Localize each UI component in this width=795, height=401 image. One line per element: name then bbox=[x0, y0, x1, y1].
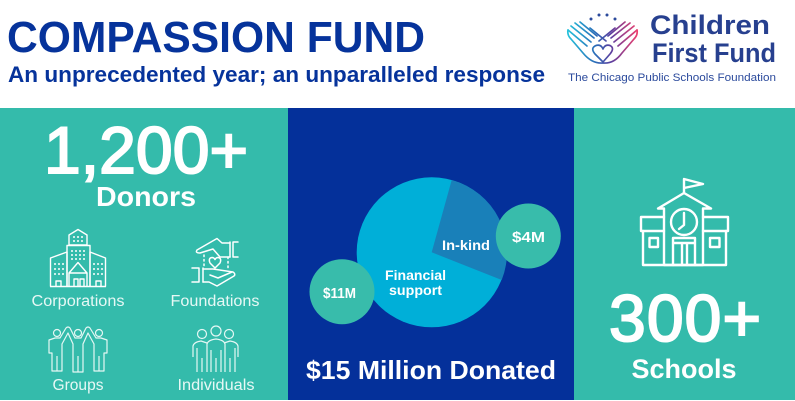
panel: schools bbox=[574, 108, 795, 400]
panel: donors bbox=[0, 108, 288, 400]
foundations label: Foundations bbox=[170, 293, 260, 310]
title: COMPASSION FUND bbox=[7, 13, 425, 62]
panel: total donated bbox=[288, 108, 574, 400]
callout: $4M: $4M bbox=[512, 229, 545, 246]
icon: groups raised arms bbox=[49, 327, 107, 372]
subtitle: An unprecedented year; an unparalleled response bbox=[8, 62, 545, 87]
logo stars bbox=[590, 14, 616, 20]
donors number: 1,200+ bbox=[44, 113, 248, 187]
callout: $4M bbox=[496, 204, 561, 268]
icon: corporations building bbox=[50, 230, 106, 286]
logo name line 1: Children bbox=[650, 10, 770, 40]
corporations label: Corporations bbox=[32, 293, 125, 310]
schools number: 300+ bbox=[609, 281, 761, 355]
pie slice: in-kind bbox=[432, 180, 507, 280]
logo name line 2: First Fund bbox=[652, 38, 776, 68]
callout: $11M bbox=[310, 259, 374, 324]
pie chart bbox=[357, 177, 507, 327]
financial support label: Financial bbox=[385, 268, 446, 283]
groups label: Groups bbox=[52, 377, 104, 394]
financial support label line 2: support bbox=[389, 283, 443, 298]
logo: Children First Fund bbox=[568, 10, 776, 84]
donors label: Donors bbox=[96, 181, 196, 212]
icon: school building bbox=[641, 179, 728, 265]
icon: foundations hands bbox=[192, 238, 238, 286]
logo tagline: The Chicago Public Schools Foundation bbox=[568, 72, 776, 84]
total heading: $15 Million Donated bbox=[306, 355, 556, 385]
in-kind label: In-kind bbox=[442, 238, 490, 253]
schools label: Schools bbox=[632, 354, 736, 384]
icon: logo hands and heart bbox=[568, 22, 637, 63]
callout: $11M: $11M bbox=[323, 285, 356, 302]
individuals label: Individuals bbox=[178, 377, 255, 394]
icon: individuals people bbox=[193, 326, 238, 372]
